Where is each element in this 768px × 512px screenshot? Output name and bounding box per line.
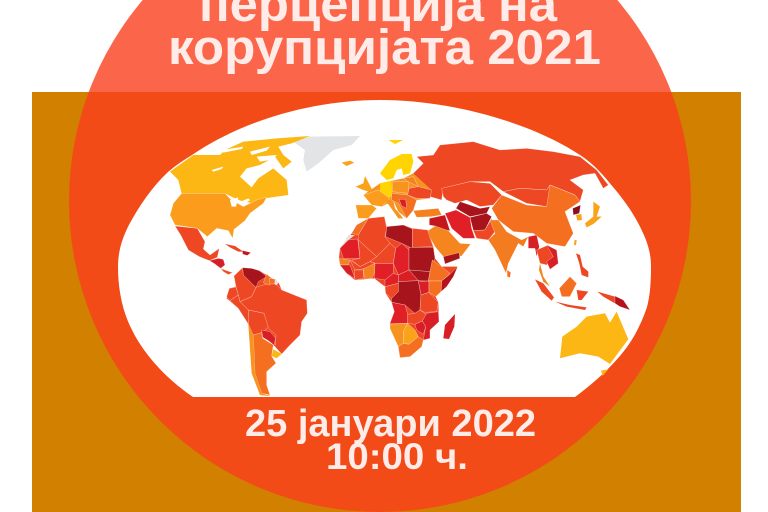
- Brazil: [240, 278, 307, 354]
- Tanzania: [420, 292, 438, 312]
- Philippines: [576, 253, 588, 277]
- Angola: [390, 302, 408, 323]
- Argentina: [253, 333, 276, 395]
- Zimbabwe: [415, 321, 426, 334]
- Poland: [392, 182, 408, 193]
- Cambodia and Vietnam: [547, 245, 558, 269]
- Sumatra: [535, 279, 554, 301]
- China: [492, 185, 580, 247]
- date: 25 јануари 2022: [245, 403, 536, 445]
- Italy: [385, 200, 403, 218]
- Pakistan: [473, 218, 495, 240]
- Balkans: [392, 193, 417, 218]
- Yemen: [443, 253, 460, 264]
- world map panel: [118, 100, 651, 397]
- Taiwan: [574, 240, 577, 245]
- Mali: [352, 240, 377, 267]
- Paraguay: [262, 330, 276, 345]
- Africa: [339, 217, 458, 358]
- Mauritania: [340, 239, 360, 258]
- Niger: [370, 243, 396, 263]
- Svalbard: [388, 140, 403, 144]
- Chile: [248, 324, 272, 396]
- Guyana: [263, 274, 273, 285]
- background panel: ochre rectangle: [32, 92, 741, 512]
- South Sudan: [409, 270, 430, 281]
- map background oval: [118, 100, 651, 397]
- DR Congo: [392, 281, 421, 313]
- Sri Lanka: [507, 270, 511, 277]
- Cuba: [225, 244, 243, 252]
- Madagascar: [443, 314, 455, 339]
- Greenland: [293, 136, 360, 172]
- Central America: [209, 258, 225, 268]
- Ukraine and Belarus: [408, 187, 432, 198]
- Canada: [170, 136, 310, 203]
- Americas: [170, 136, 360, 396]
- Namibia: [390, 323, 408, 347]
- Borneo: [559, 277, 577, 297]
- Serbia and Bosnia: [399, 199, 407, 208]
- Kenya: [429, 281, 442, 297]
- Ghana and Togo: [363, 263, 375, 278]
- Scandinavia: [380, 154, 413, 180]
- Guinea and Sierra Leone: [340, 265, 355, 278]
- Colombia: [234, 268, 256, 302]
- Eurasia and Oceania: [412, 142, 630, 376]
- Mozambique: [422, 312, 439, 340]
- Western Sahara: [342, 235, 355, 247]
- Turkey: [413, 208, 442, 217]
- Sudan: [409, 247, 435, 272]
- Germany and Netherlands: [380, 181, 392, 199]
- French Guiana: [274, 279, 279, 285]
- title second line: корупцијата 2021: [168, 21, 601, 75]
- Chad: [393, 243, 409, 275]
- Australia: [560, 312, 628, 364]
- USA: [170, 193, 267, 238]
- Great Lakes: [230, 197, 250, 207]
- Iran: [445, 210, 475, 238]
- UK and Ireland: [356, 176, 372, 192]
- South Korea: [576, 214, 582, 221]
- Ivory Coast: [354, 270, 363, 280]
- Gabon and Congo: [385, 283, 398, 298]
- Burkina Faso: [350, 260, 375, 270]
- Somalia: [441, 267, 458, 292]
- Central African Republic: [398, 270, 418, 282]
- Malaysia peninsula: [539, 263, 550, 287]
- South America silhouette: [227, 268, 307, 354]
- Peru: [230, 295, 248, 324]
- Sulawesi: [577, 290, 588, 300]
- Papua New Guinea: [615, 296, 630, 310]
- Panama and Costa Rica: [221, 268, 233, 275]
- Botswana: [403, 323, 418, 344]
- Libya: [386, 225, 412, 248]
- France: [363, 190, 390, 207]
- South Africa: [398, 337, 423, 358]
- Japan: [585, 202, 602, 227]
- Senegal: [339, 258, 350, 265]
- Morocco: [352, 218, 368, 235]
- Haiti: [243, 251, 251, 255]
- Thailand and Laos: [537, 245, 553, 265]
- Myanmar: [528, 235, 539, 257]
- Egypt: [412, 228, 433, 247]
- Suriname: [269, 278, 276, 284]
- Bolivia: [248, 310, 268, 335]
- Mexico: [175, 226, 219, 261]
- Venezuela: [243, 268, 267, 287]
- Spain and Portugal: [356, 205, 377, 218]
- Baltics: [403, 177, 418, 187]
- Mongolia: [503, 185, 575, 207]
- Iraq and Syria: [429, 215, 450, 231]
- Java: [555, 302, 587, 310]
- Ethiopia: [428, 260, 450, 281]
- Ecuador: [227, 287, 238, 301]
- Canadian Arctic channels: [212, 147, 277, 172]
- Cameroon: [385, 273, 398, 287]
- Nigeria: [374, 263, 393, 280]
- Europe: [342, 140, 442, 218]
- time: 10:00 ч.: [326, 436, 468, 477]
- Europe silhouette: [363, 173, 432, 218]
- Zambia: [408, 310, 427, 324]
- West Papua: [597, 292, 615, 303]
- Tasmania: [601, 369, 608, 376]
- North Korea: [573, 205, 581, 215]
- Algeria: [358, 217, 390, 257]
- India: [488, 220, 528, 273]
- Saudi Arabia: [427, 226, 471, 257]
- Russia: [412, 142, 608, 202]
- Kazakhstan: [442, 182, 502, 207]
- Uruguay: [272, 349, 282, 358]
- Central Asia: [456, 202, 490, 217]
- Iceland: [342, 161, 354, 166]
- Uganda and Rwanda: [418, 281, 429, 295]
- Africa silhouette: [339, 217, 458, 358]
- Afghanistan: [470, 213, 492, 231]
